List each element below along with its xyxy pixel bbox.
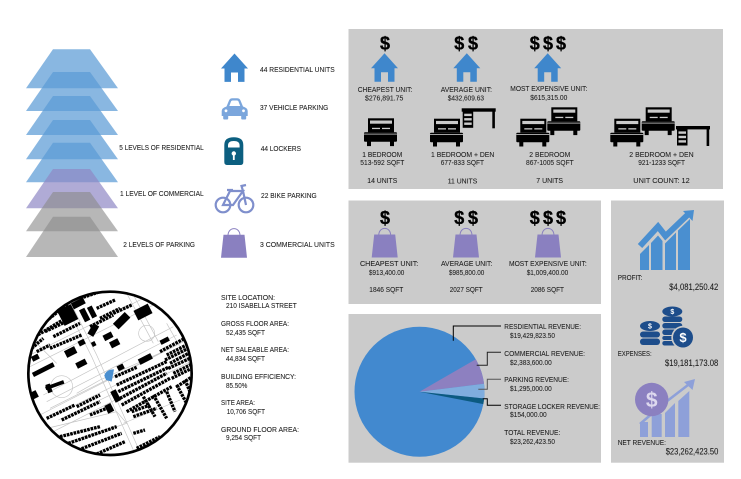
icon: net revenue chart: $ [646, 389, 658, 412]
site data: 9,254 SQFT [226, 433, 261, 442]
stack labels [119, 143, 204, 249]
expenses text: EXPENSES: [618, 349, 652, 358]
dollar signs: residential: $ [556, 34, 566, 54]
leader lines [453, 326, 501, 405]
unit types: UNIT COUNT: 12 [633, 176, 690, 185]
icon: bicycle [216, 185, 253, 212]
commercial prices: $985,800.00 [449, 268, 484, 277]
unit types: 921-1233 SQFT [638, 158, 685, 167]
amenity counts: 37 VEHICLE PARKING [260, 103, 328, 112]
site data: 85.50% [226, 381, 247, 390]
dollar signs: commercial [380, 208, 566, 228]
amenity counts: 44 LOCKERS [261, 144, 301, 153]
pie chart [354, 327, 484, 457]
panel: financial summary [611, 200, 724, 463]
expenses text [618, 349, 718, 368]
site data: SITE AREA: [221, 398, 255, 407]
stack labels: 5 LEVELS OF RESIDENTIAL [119, 143, 204, 152]
revenue labels: COMMERCIAL REVENUE: [504, 349, 585, 358]
icon: coins [640, 306, 695, 349]
panel: commercial units [348, 200, 601, 304]
revenue labels: $1,295,000.00 [510, 384, 552, 393]
site data [221, 293, 299, 442]
commercial prices: 1846 SQFT [369, 285, 404, 294]
site data: 10,706 SQFT [227, 407, 265, 416]
icon: coins: $ [648, 324, 652, 330]
unit types: 677-833 SQFT [441, 158, 484, 167]
net revenue text: $23,262,423.50 [666, 447, 718, 457]
icon: net revenue chart [635, 379, 695, 437]
dollar signs: residential: $ [543, 34, 553, 54]
amenity counts: 44 RESIDENTIAL UNITS [260, 65, 335, 74]
dollar signs: residential [380, 34, 566, 54]
icons: beds and desks [364, 107, 710, 146]
dollar signs: commercial: $ [543, 208, 553, 228]
site map [27, 290, 193, 456]
amenity counts: 3 COMMERCIAL UNITS [260, 240, 335, 249]
dollar signs: residential: $ [454, 34, 464, 54]
icon: profit chart [640, 210, 694, 270]
unit types: 2 BEDROOM + DEN [629, 150, 694, 159]
revenue labels: TOTAL REVENUE: [504, 428, 560, 437]
amenity counts [260, 65, 335, 249]
site data: 210 ISABELLA STREET [226, 301, 297, 310]
commercial prices: CHEAPEST UNIT: [360, 259, 418, 268]
icon: lock [224, 137, 243, 165]
icon: shopping bag [221, 229, 247, 258]
dollar signs: commercial: $ [454, 208, 464, 228]
stack labels: 1 LEVEL OF COMMERCIAL [120, 189, 204, 198]
dollar signs: residential: $ [380, 34, 390, 54]
unit types: 11 UNITS [448, 176, 477, 186]
profit text [618, 273, 718, 292]
dollar signs: residential: $ [468, 34, 478, 54]
amenity counts: 22 BIKE PARKING [261, 191, 317, 200]
expenses text: $19,181,173.08 [665, 358, 718, 368]
revenue labels: STORAGE LOCKER REVENUE: [504, 402, 600, 411]
revenue labels: $154,000.00 [510, 410, 547, 419]
dollar signs: commercial: $ [556, 208, 566, 228]
site data: GROSS FLOOR AREA: [221, 319, 289, 328]
commercial prices: 2027 SQFT [450, 285, 483, 294]
unit types: 1 BEDROOM + DEN [431, 150, 494, 159]
site data: NET SALEABLE AREA: [221, 345, 289, 354]
net revenue text [618, 438, 718, 457]
unit types: 14 UNITS [367, 176, 397, 185]
dollar signs: residential: $ [530, 34, 540, 54]
panel: revenue pie [348, 314, 601, 463]
profit text: $4,081,250.42 [669, 282, 718, 292]
dollar signs: commercial: $ [530, 208, 540, 228]
unit prices: AVERAGE UNIT: [441, 85, 492, 94]
site data: 44,834 SQFT [226, 354, 265, 363]
revenue labels: $23,262,423.50 [510, 437, 555, 446]
site data: BUILDING EFFICIENCY: [221, 372, 296, 381]
profit text: PROFIT: [618, 273, 642, 282]
dollar signs: commercial: $ [468, 208, 478, 228]
unit prices: $432,609.63 [448, 94, 484, 102]
commercial prices: AVERAGE UNIT: [441, 259, 492, 268]
site data: 52,435 SQFT [226, 328, 265, 337]
revenue labels: PARKING REVENUE: [504, 375, 569, 384]
unit types: 2 BEDROOM [529, 150, 570, 159]
revenue labels [504, 322, 600, 446]
revenue labels: $19,429,823.50 [510, 331, 555, 340]
unit prices: CHEAPEST UNIT: [358, 85, 412, 94]
panel: residential units [348, 29, 723, 189]
unit types: 513-592 SQFT [360, 158, 405, 167]
unit types: 1 BEDROOM [362, 150, 402, 159]
stack labels: 2 LEVELS OF PARKING [123, 240, 195, 249]
unit prices: $615,315.00 [530, 93, 567, 102]
unit prices: $276,891.75 [365, 94, 403, 102]
building section stack [26, 49, 118, 257]
icons: bags [372, 228, 561, 258]
commercial prices: MOST EXPENSIVE UNIT: [509, 259, 587, 268]
unit types: 7 UNITS [536, 176, 563, 185]
dollar signs: commercial: $ [380, 208, 390, 228]
icon: house [221, 54, 248, 82]
icon: car [222, 98, 248, 120]
unit types [360, 150, 694, 186]
site data: SITE LOCATION: [221, 293, 275, 302]
commercial prices [360, 259, 587, 294]
icon: coins: $ [679, 330, 687, 345]
unit prices: MOST EXPENSIVE UNIT: [510, 84, 587, 93]
commercial prices: $913,400.00 [369, 268, 404, 277]
site data: GROUND FLOOR AREA: [221, 425, 299, 434]
unit types: 867-1005 SQFT [526, 158, 574, 167]
revenue labels: $2,383,600.00 [510, 358, 552, 367]
revenue labels: RESDIENTIAL REVENUE: [504, 322, 581, 331]
unit prices [358, 84, 587, 102]
commercial prices: $1,009,400.00 [527, 268, 568, 277]
icon: coins: $ [670, 309, 674, 316]
net revenue text: NET REVENUE: [618, 438, 666, 447]
icons: houses [371, 53, 561, 82]
commercial prices: 2086 SQFT [531, 285, 564, 294]
